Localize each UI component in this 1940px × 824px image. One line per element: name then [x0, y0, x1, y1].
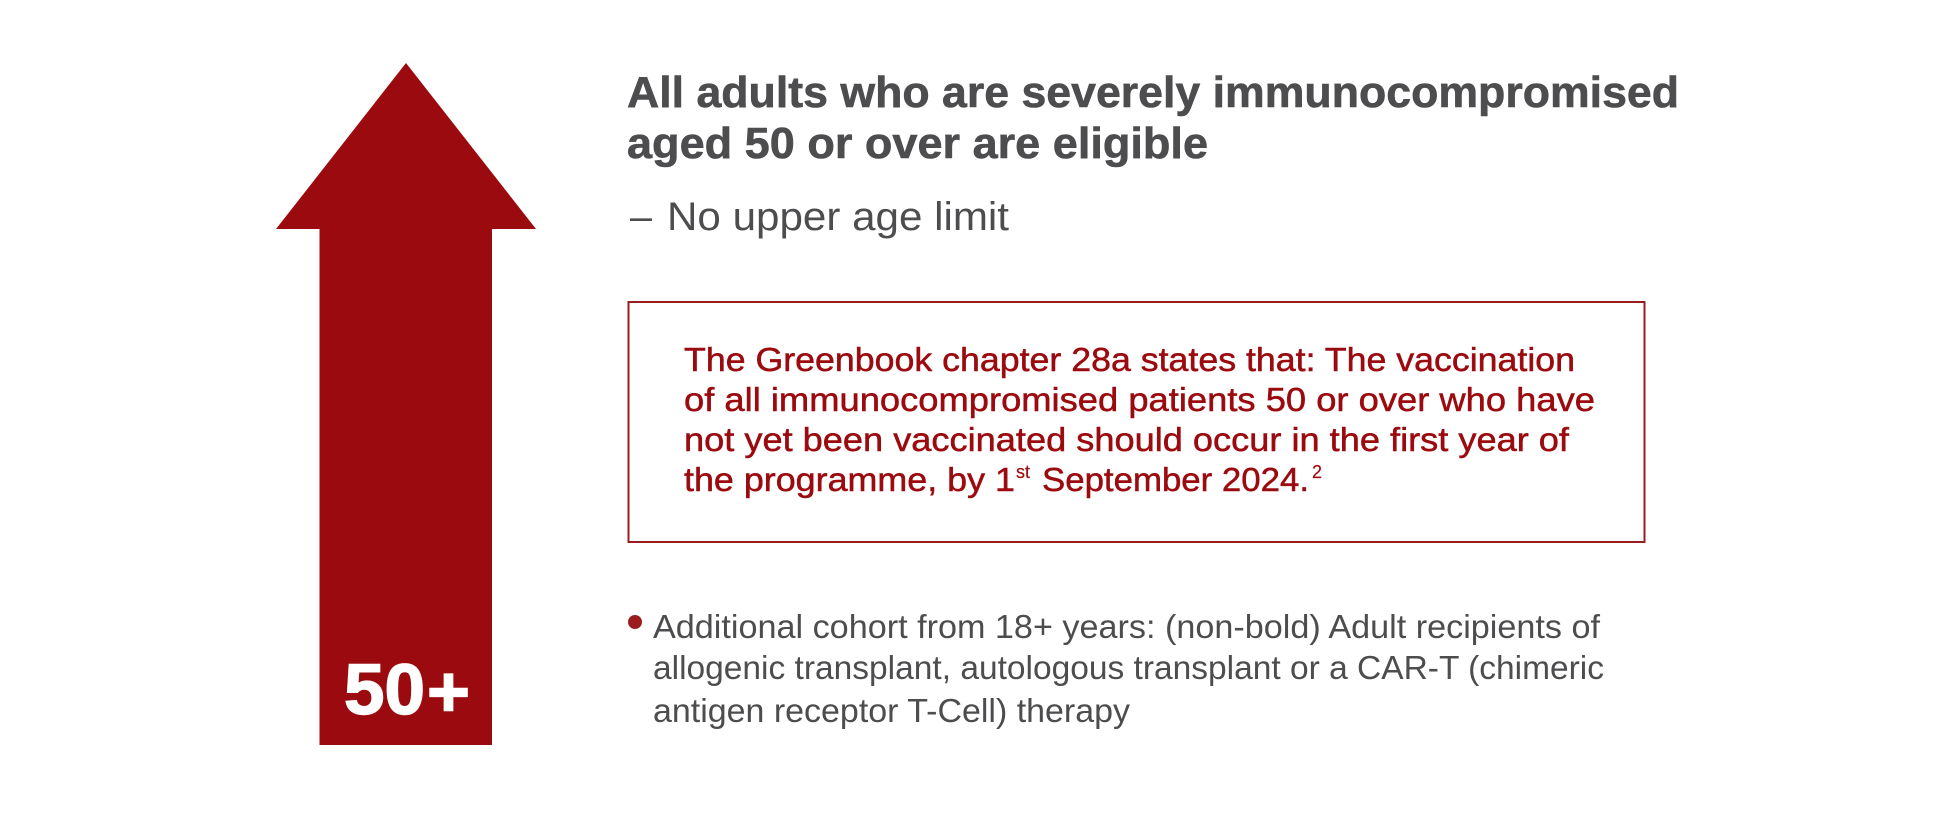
subheading: no upper age limit: No upper age limit	[667, 195, 1009, 239]
callout border	[628, 302, 1644, 542]
bullet: additional cohort	[628, 608, 1604, 729]
arrow label: 50+: +	[427, 653, 470, 732]
callout text: st	[1016, 462, 1030, 482]
subheading: no upper age limit: –	[630, 195, 653, 239]
bullet text: allogenic transplant, autologous transplant or a CAR-T (chimeric	[653, 649, 1604, 686]
heading: aged 50 or over are eligible	[627, 119, 1208, 168]
callout text: The Greenbook chapter 28a states that: The vaccination	[684, 341, 1575, 378]
callout: Greenbook statement	[628, 302, 1644, 542]
callout text: of all immunocompromised patients 50 or over who have	[684, 381, 1595, 418]
arrow label: 50+: 50	[344, 651, 425, 730]
heading: All adults who are severely immunocompromised	[627, 68, 1679, 117]
callout text: not yet been vaccinated should occur in the first year of	[684, 421, 1570, 458]
callout text: the programme, by 1	[684, 461, 1015, 498]
callout text: September 2024.	[1042, 461, 1309, 498]
bullet text: Additional cohort from 18+ years: (non-bold) Adult recipients of	[653, 608, 1601, 645]
callout text: 2	[1312, 462, 1322, 482]
bullet text: antigen receptor T-Cell) therapy	[653, 692, 1131, 729]
icon: upward arrow with 50+ label	[276, 63, 536, 745]
arrow label: 50+	[344, 651, 470, 732]
bullet dot	[628, 615, 642, 629]
callout text	[684, 341, 1595, 498]
heading	[627, 68, 1679, 168]
arrow shape	[276, 63, 536, 745]
bullet text	[653, 608, 1604, 729]
